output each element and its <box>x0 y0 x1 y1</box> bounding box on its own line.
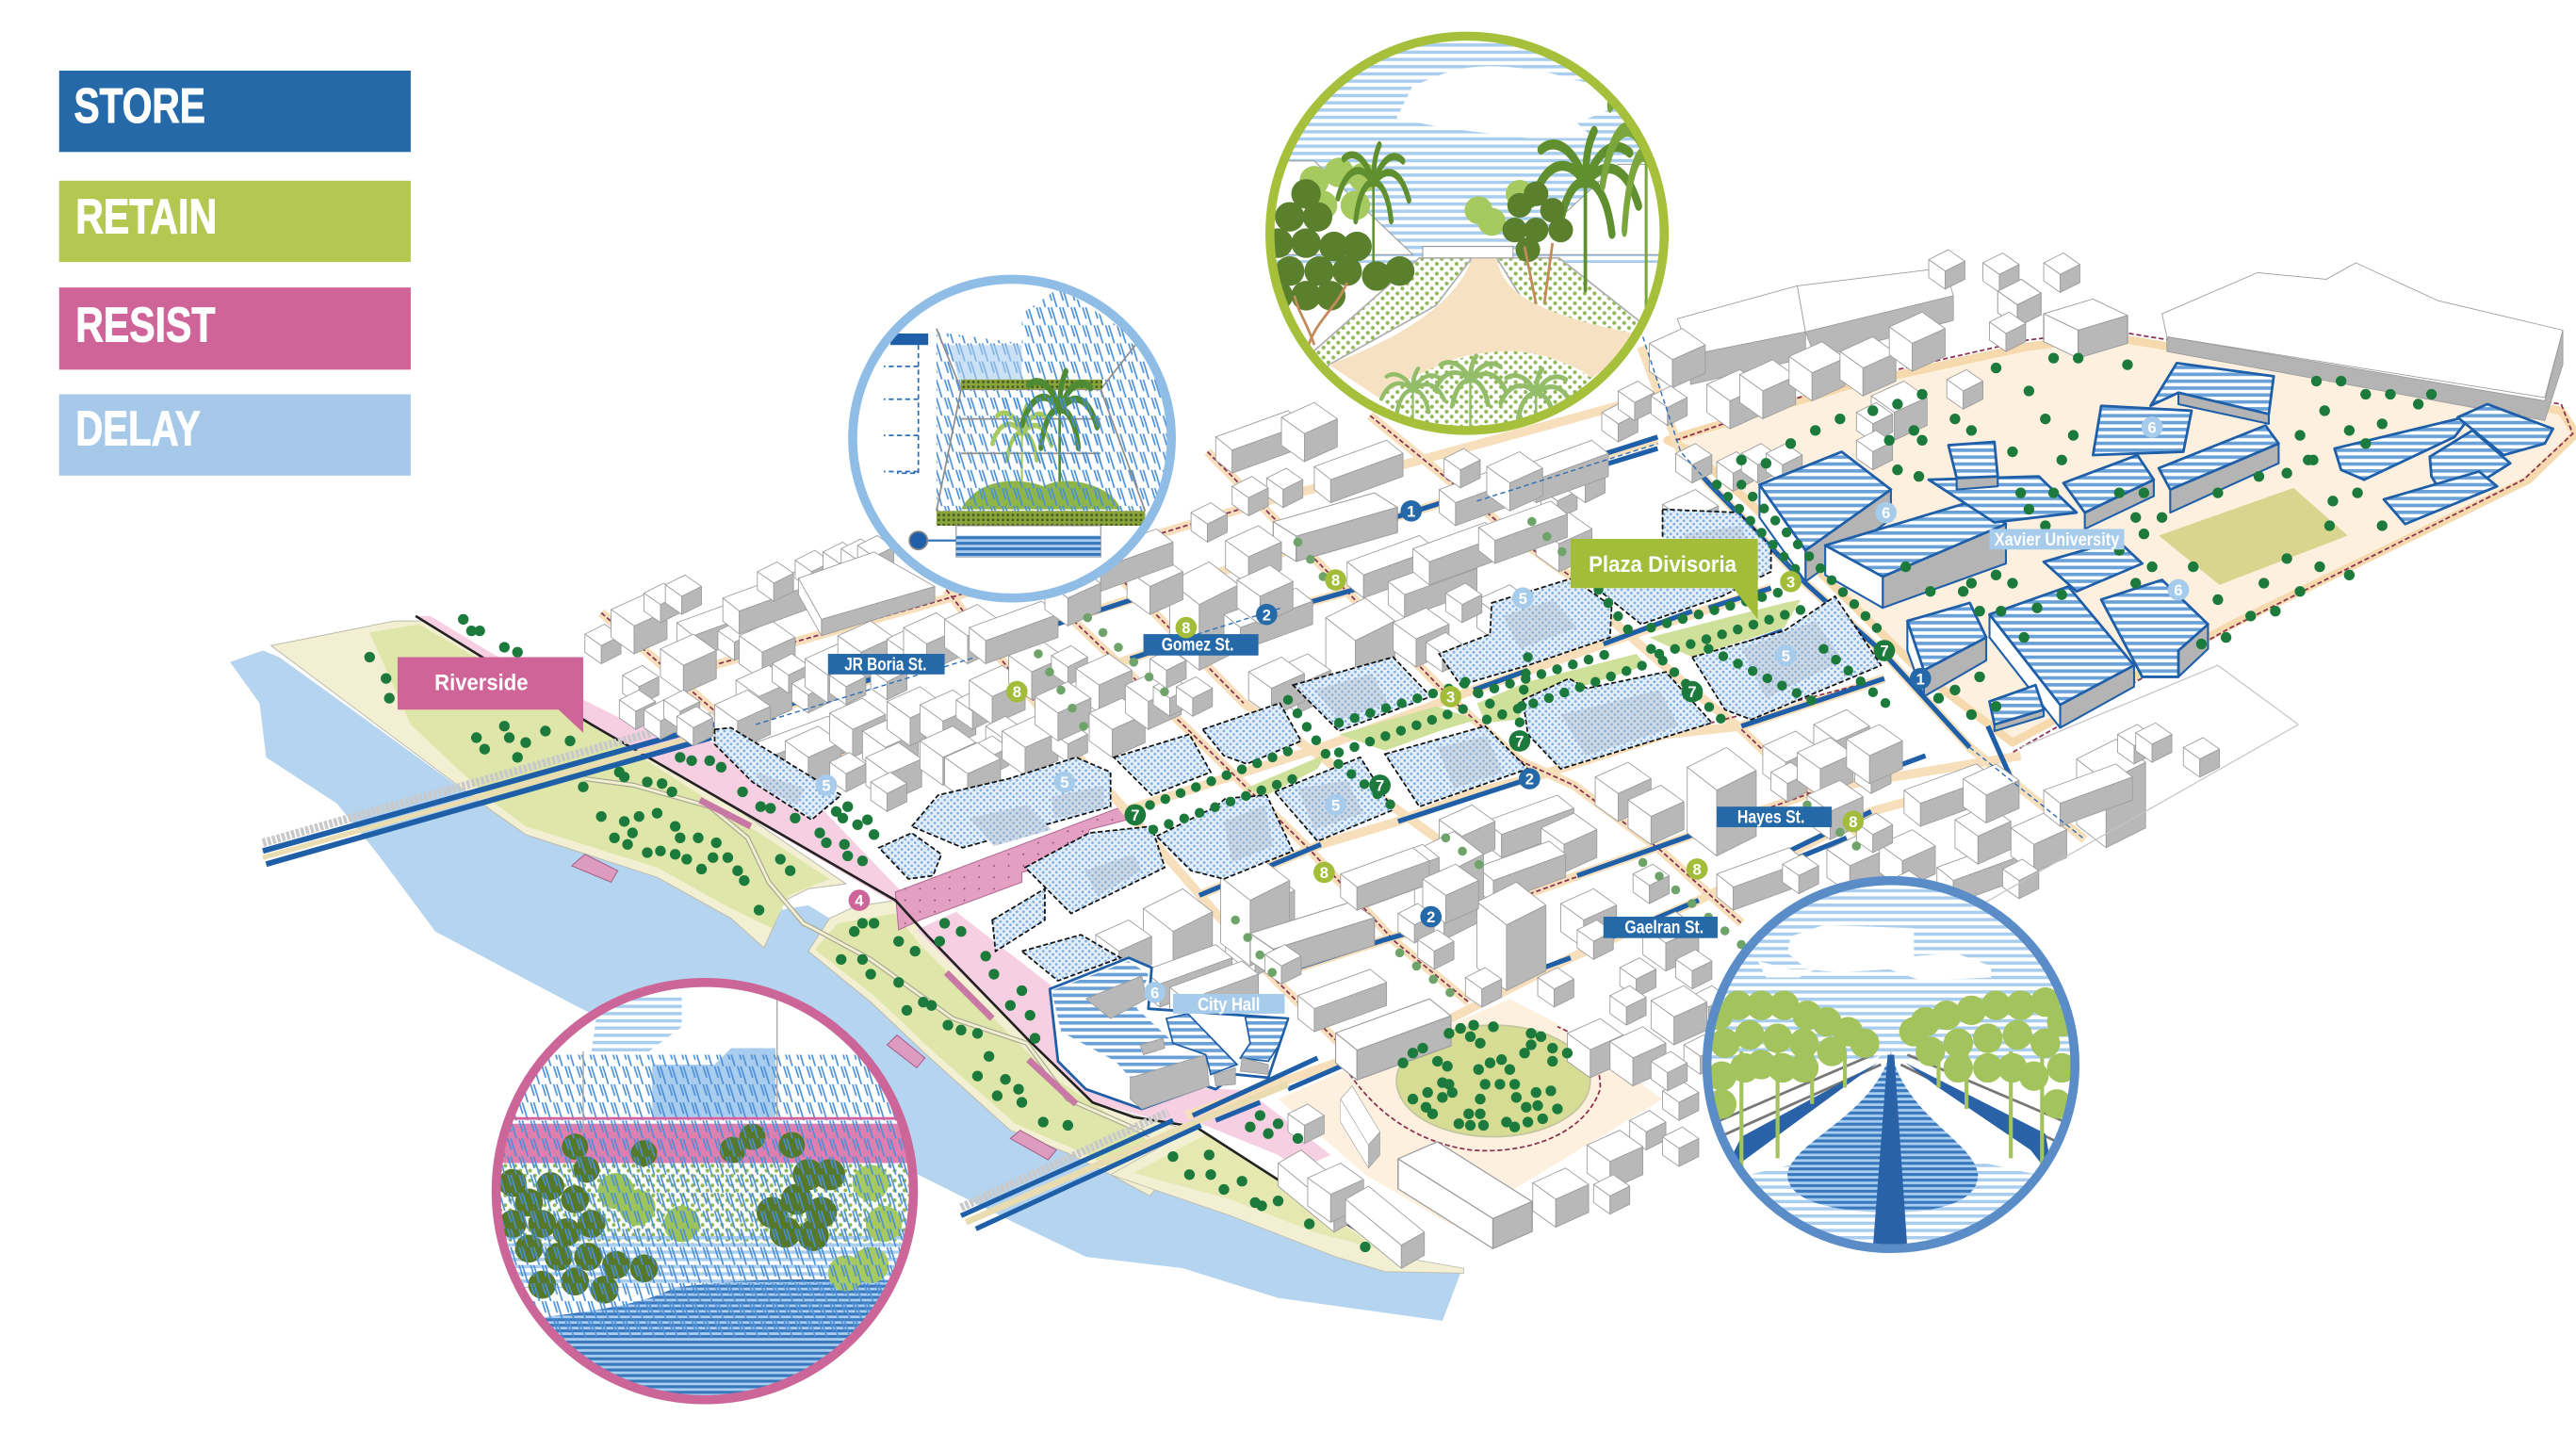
mid ground <box>493 1164 917 1245</box>
clouds <box>1758 925 1991 981</box>
street and place labels <box>398 529 2125 1015</box>
pink band <box>493 1117 917 1120</box>
sky band <box>950 345 1022 388</box>
badge numbers: 5 <box>1060 773 1068 791</box>
lower block face <box>1131 1054 1209 1109</box>
water light <box>493 1232 917 1288</box>
tank <box>956 526 1101 557</box>
legend: retain: RETAIN <box>75 190 217 245</box>
badge numbers: 5 <box>822 777 831 795</box>
large warehouse <box>2162 263 2563 420</box>
badge numbers: 8 <box>1320 864 1329 882</box>
peach path <box>1329 258 1651 398</box>
rain overlay <box>493 1124 917 1337</box>
legend: delay <box>59 395 411 476</box>
badge numbers: 8 <box>1331 572 1340 590</box>
corridor trees <box>1150 484 1889 830</box>
label: Riverside <box>398 658 583 733</box>
right fronds <box>1914 1002 2062 1104</box>
badge numbers: 6 <box>2174 581 2183 599</box>
label: Riverside: Riverside <box>434 670 529 695</box>
circle: retain view <box>1265 36 1689 445</box>
lawn right <box>1496 256 1639 334</box>
lower bank lawn <box>815 914 1150 1168</box>
xavier campus ground <box>1668 336 2576 742</box>
plaza outer ring <box>1345 1027 1600 1150</box>
plaza ground <box>1279 999 1663 1226</box>
south bank lawn <box>1133 1133 1377 1248</box>
label: City Hall: City Hall <box>1198 995 1260 1015</box>
legend: store <box>59 71 411 152</box>
label: City Hall <box>1173 994 1285 1015</box>
label: Gomez St.: Gomez St. <box>1162 636 1233 656</box>
store blue drains <box>751 437 2014 1120</box>
downpipes <box>884 345 919 473</box>
canal right <box>1906 1063 2054 1180</box>
upper bank <box>271 621 846 948</box>
back trees <box>575 1137 791 1170</box>
legend: resist <box>59 287 411 369</box>
badge numbers: 7 <box>1376 777 1384 795</box>
numbered badges <box>816 416 2189 1003</box>
riverside west blocks <box>714 605 1087 811</box>
lamp posts <box>583 994 777 1133</box>
badge numbers: 8 <box>1693 861 1702 879</box>
riverside banks <box>271 621 1464 1273</box>
drop <box>1787 1051 1978 1213</box>
circle: resist riverside view <box>493 983 920 1413</box>
second hatched roof <box>1166 1014 1237 1074</box>
lower water fade <box>1750 1142 2037 1248</box>
riverwalk inner <box>585 779 1150 1135</box>
edge outlines <box>1986 665 2298 902</box>
badge numbers: 6 <box>2148 418 2157 436</box>
rain sky <box>493 1054 917 1124</box>
street beds <box>601 347 2085 1115</box>
maroon dashed lines <box>601 330 2573 1051</box>
skyline <box>652 1049 775 1117</box>
label: JR Boria St.: JR Boria St. <box>844 655 926 675</box>
pipe <box>919 540 956 542</box>
south bank <box>1111 1127 1464 1273</box>
campus west white buildings <box>1675 402 1893 491</box>
badge numbers <box>822 418 2183 1001</box>
third block face <box>1240 1058 1268 1074</box>
legend: retain <box>59 181 411 262</box>
green floor band <box>961 380 1102 389</box>
main hatched roof <box>1052 961 1206 1078</box>
blue site outline <box>1050 958 1288 1109</box>
right palms <box>1532 131 1639 290</box>
sky lines <box>592 994 682 1051</box>
label: Hayes St.: Hayes St. <box>1737 808 1804 828</box>
circle: store canal view <box>1705 881 2077 1248</box>
buildings <box>585 250 2563 1268</box>
badge numbers: 6 <box>1150 984 1159 1001</box>
badge numbers: 7 <box>1687 683 1697 701</box>
badge numbers: 5 <box>1331 797 1340 815</box>
northwest cluster <box>585 535 935 746</box>
delay blocks <box>714 510 1881 981</box>
lower bank <box>808 901 1199 1196</box>
badge numbers: 8 <box>1182 619 1190 637</box>
second block face <box>1215 1067 1235 1086</box>
city hall buildings <box>1050 958 1288 1109</box>
bridge two <box>961 1084 1288 1229</box>
water dark <box>493 1279 920 1413</box>
olive trees right <box>1515 194 1560 250</box>
third hatched roof <box>1240 1017 1288 1061</box>
grey tower <box>1086 976 1147 1018</box>
badge numbers: 5 <box>1782 647 1790 665</box>
lawn left <box>1313 256 1472 367</box>
legend: delay: DELAY <box>75 402 201 457</box>
xavier roofs <box>1759 363 2553 731</box>
bridge one <box>263 715 714 864</box>
olive trees left <box>1279 194 1400 296</box>
sky <box>1705 887 2077 1060</box>
badge numbers: 7 <box>1515 733 1524 751</box>
soil strip <box>937 511 1145 526</box>
light canopy right <box>1478 194 1520 221</box>
middle north blocks <box>970 382 1719 757</box>
side buildings <box>1268 161 1675 254</box>
terrace <box>1423 247 1513 258</box>
right tree <box>773 1175 830 1235</box>
pink triangle south <box>1201 1099 1330 1170</box>
badge numbers: 5 <box>1519 590 1527 608</box>
blue bar <box>890 334 928 345</box>
badge numbers: 6 <box>1882 504 1890 522</box>
cloud <box>1396 66 1626 138</box>
upper bank lawn <box>369 625 830 928</box>
badge numbers: 2 <box>1525 771 1534 789</box>
label: Plaza Divisoria <box>1571 539 1758 619</box>
street network <box>601 330 2573 1150</box>
left foliage <box>513 1183 644 1290</box>
palm light <box>992 406 1052 490</box>
river <box>230 651 1460 1321</box>
bottom palms <box>1379 366 1447 418</box>
badge numbers: 7 <box>1880 643 1889 660</box>
badge numbers: 8 <box>1849 813 1857 831</box>
badge numbers: 2 <box>1427 908 1435 926</box>
trunks <box>1295 243 1553 353</box>
resist pink zone <box>416 616 1398 1257</box>
valve ball <box>909 531 927 549</box>
black road edge <box>416 616 1398 1257</box>
east blocks <box>1798 723 2220 910</box>
middle south blocks <box>1096 709 1891 1268</box>
sports field <box>2159 488 2348 585</box>
left fronds <box>1719 1005 1865 1104</box>
trees <box>369 358 2432 1247</box>
circle: delay section <box>853 279 1182 598</box>
badge numbers: 2 <box>1263 606 1271 624</box>
centre channel <box>1873 1054 1907 1248</box>
sidewalk <box>1708 1054 1881 1208</box>
canal left <box>1725 1063 1878 1170</box>
label: Hayes St. <box>1717 806 1832 828</box>
jetties <box>572 855 1056 1160</box>
light canopy left <box>1314 172 1363 205</box>
badge numbers: 8 <box>1013 683 1021 701</box>
building back <box>937 329 1145 511</box>
shrubs <box>961 481 1120 510</box>
road walls <box>700 800 1076 1104</box>
badge numbers: 3 <box>1786 573 1795 591</box>
green corridors <box>1246 599 1801 795</box>
bridges <box>263 715 1288 1229</box>
rain on foliage <box>961 395 1120 510</box>
label: Plaza Divisoria: Plaza Divisoria <box>1589 552 1736 578</box>
central park lawn <box>1396 1025 1590 1137</box>
grey massing within delay blocks <box>756 526 1843 895</box>
small roof box <box>1140 1038 1165 1054</box>
flood wall promenade upper <box>416 616 901 904</box>
label: Gaelran St.: Gaelran St. <box>1624 918 1704 937</box>
badge numbers: 4 <box>855 892 864 910</box>
lawn bottom <box>1378 350 1592 426</box>
badge numbers: 1 <box>1916 670 1925 688</box>
mid palm left <box>1338 145 1409 262</box>
campus north buildings <box>1650 250 2128 440</box>
palm dark <box>1022 371 1097 489</box>
promenade lower <box>917 912 1265 1124</box>
street trees <box>1038 510 1856 1002</box>
riverwalk path <box>585 779 1150 1135</box>
pink boulevard <box>895 806 1127 930</box>
badge numbers: 7 <box>1131 806 1139 824</box>
right reeds <box>846 1183 884 1273</box>
sky <box>1265 42 1670 263</box>
blue inner dash <box>756 336 2085 839</box>
badge numbers: 3 <box>1446 688 1455 706</box>
badge numbers: 1 <box>1407 502 1415 520</box>
trunks <box>1741 1051 2042 1191</box>
tank water <box>956 535 1101 557</box>
legend: resist: RESIST <box>75 299 215 353</box>
road lines <box>1708 1054 2073 1150</box>
centre shrubs <box>616 1191 682 1224</box>
rain wall <box>937 287 1182 511</box>
legend <box>59 71 411 476</box>
legend: store: STORE <box>73 79 205 134</box>
label: Xavier University: Xavier University <box>1995 530 2120 550</box>
pink wall <box>493 1124 917 1164</box>
